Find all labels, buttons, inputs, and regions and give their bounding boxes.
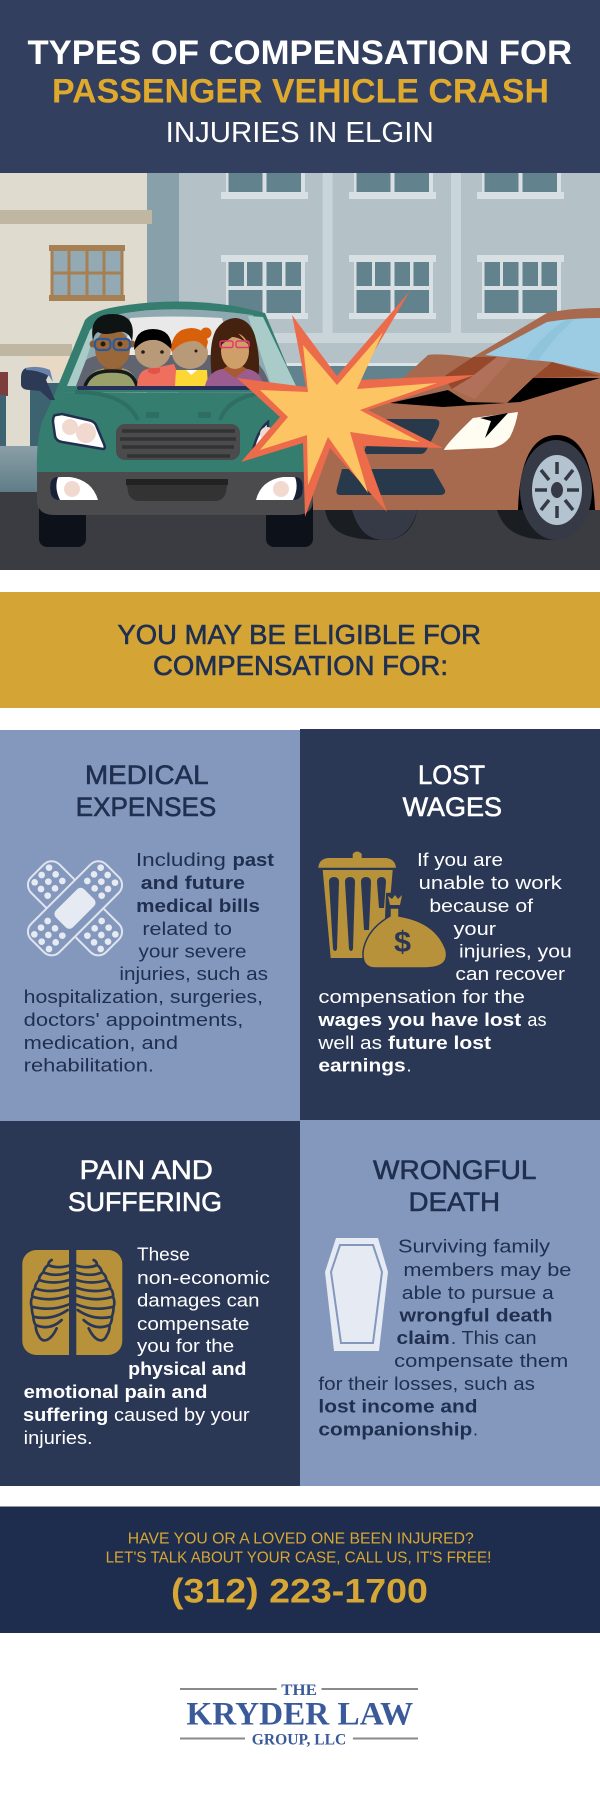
- body text: pain and suffering: damages can: [137, 1290, 260, 1310]
- lower air intake: [126, 479, 228, 501]
- heading: wrongful death: DEATH: [409, 1187, 500, 1217]
- body text: pain and suffering: compensate: [137, 1314, 250, 1334]
- body text: medical expenses: hospitalization, surgeries,: [24, 987, 263, 1007]
- body text: pain and suffering: emotional pain and: [24, 1382, 207, 1402]
- heading: medical expenses: [76, 760, 216, 822]
- driver: [85, 314, 138, 386]
- body text: medical expenses: your severe: [138, 942, 246, 962]
- heading: lost wages: [403, 760, 502, 822]
- rear seats: [76, 355, 270, 386]
- call to action banner: LET'S TALK ABOUT YOUR CASE, CALL US, IT'S FREE!: [106, 1550, 491, 1566]
- icon: coffin: [325, 1238, 388, 1351]
- logo: the kryder law group: KRYDER LAW: [186, 1696, 413, 1732]
- body text: lost wages: If you are: [417, 850, 503, 870]
- icon: trash can with money bag: [318, 852, 447, 968]
- heading: pain and suffering: [68, 1155, 222, 1217]
- body text: wrongful death: companionship: [318, 1420, 472, 1440]
- body text: wrongful death: members may be: [403, 1260, 571, 1280]
- body text: wrongful death: claim: [396, 1328, 450, 1348]
- body text: medical expenses: related to: [142, 919, 232, 939]
- body text: pain and suffering: non-economic: [137, 1268, 270, 1288]
- heading: lost wages: LOST: [418, 760, 485, 790]
- heading: pain and suffering: PAIN AND: [80, 1155, 213, 1185]
- body text: lost wages: compensation for the: [318, 987, 525, 1007]
- body text: pain and suffering: physical and: [128, 1359, 246, 1379]
- heading: medical expenses: EXPENSES: [76, 792, 216, 822]
- header banner: [0, 0, 600, 173]
- body text: wrongful death: . This can: [451, 1328, 536, 1348]
- body text: pain and suffering: [23, 1244, 270, 1448]
- body text: medical expenses: past: [232, 850, 274, 870]
- call to action banner: (312) 223-1700: [171, 1572, 428, 1610]
- body text: pain and suffering: These: [137, 1244, 190, 1264]
- side mirror: [21, 367, 55, 400]
- section banner: you may be eligible: YOU MAY BE ELIGIBLE FOR: [118, 619, 481, 650]
- body text: lost wages: future lost: [388, 1033, 491, 1053]
- cabin: [55, 301, 298, 393]
- body text: medical expenses: injuries, such as: [119, 964, 268, 984]
- fog lights: [50, 477, 303, 500]
- icon: crossed bandages: [23, 857, 127, 960]
- body text: lost wages: wages you have lost: [317, 1010, 521, 1030]
- body text: pain and suffering: caused by your: [114, 1405, 250, 1425]
- logo: the kryder law group: THE: [281, 1682, 317, 1699]
- body text: lost wages: unable to work: [419, 873, 563, 893]
- body text: wrongful death: Surviving family: [398, 1236, 550, 1256]
- body text: lost wages: as: [527, 1010, 546, 1030]
- section banner: you may be eligible: [0, 592, 600, 708]
- body text: pain and suffering: suffering: [23, 1405, 108, 1425]
- body text: medical expenses: rehabilitation.: [24, 1056, 154, 1076]
- header banner: INJURIES IN ELGIN: [166, 117, 434, 149]
- body text: lost wages: injuries, you: [459, 942, 572, 962]
- body text: pain and suffering: injuries.: [24, 1428, 93, 1448]
- headlights: [53, 414, 274, 450]
- child two: [171, 328, 212, 386]
- child one: [134, 329, 177, 386]
- crash starburst: [237, 291, 475, 517]
- logo: the kryder law group: [180, 1682, 418, 1748]
- illustration: car crash street scene: [0, 173, 600, 570]
- body text: lost wages: because of: [429, 896, 534, 916]
- body text: lost wages: .: [406, 1056, 412, 1076]
- front body: [37, 393, 313, 475]
- body text: wrongful death: [318, 1236, 571, 1440]
- heading: medical expenses: MEDICAL: [85, 760, 209, 790]
- body text: lost wages: your: [454, 919, 496, 939]
- bumper: [37, 472, 313, 515]
- section banner: you may be eligible: COMPENSATION FOR:: [153, 650, 448, 681]
- body text: medical expenses: Including: [136, 850, 226, 870]
- body text: wrongful death: wrongful death: [398, 1306, 553, 1326]
- body text: wrongful death: compensate them: [394, 1351, 568, 1371]
- body text: wrongful death: able to pursue a: [402, 1283, 555, 1303]
- heading: lost wages: WAGES: [403, 792, 502, 822]
- body text: lost wages: [317, 850, 572, 1076]
- body text: medical expenses: and future: [141, 873, 245, 893]
- body text: medical expenses: medication, and: [24, 1033, 178, 1053]
- body text: pain and suffering: you for the: [137, 1336, 234, 1356]
- tires: [39, 501, 313, 547]
- icon: rib cage: [22, 1248, 122, 1358]
- logo: the kryder law group: GROUP, LLC: [252, 1731, 346, 1748]
- green car: [21, 301, 313, 547]
- panel: lost wages: [300, 729, 600, 1120]
- panel: pain and suffering: [0, 1121, 300, 1486]
- header banner: TYPES OF COMPENSATION FOR: [28, 34, 572, 72]
- body text: lost wages: can recover: [455, 964, 565, 984]
- icon: trash can with money bag: $: [394, 926, 411, 959]
- body text: wrongful death: for their losses, such as: [318, 1374, 535, 1394]
- body text: medical expenses: [24, 850, 274, 1076]
- header banner: PASSENGER VEHICLE CRASH: [52, 72, 549, 110]
- heading: wrongful death: [373, 1155, 536, 1217]
- panel: medical expenses: [0, 730, 300, 1121]
- body text: lost wages: earnings: [318, 1056, 406, 1076]
- body text: lost wages: well as: [317, 1033, 382, 1053]
- building windows: [221, 173, 564, 319]
- heading: pain and suffering: SUFFERING: [68, 1187, 222, 1217]
- background buildings: [0, 173, 600, 493]
- road: [0, 492, 600, 570]
- body text: medical expenses: medical bills: [136, 896, 260, 916]
- heading: wrongful death: WRONGFUL: [373, 1155, 536, 1185]
- call to action banner: [0, 1506, 600, 1633]
- brown car: [310, 308, 600, 540]
- grille: [116, 424, 240, 460]
- mother: [205, 318, 263, 386]
- panel: wrongful death: [300, 1120, 600, 1486]
- call to action banner: HAVE YOU OR A LOVED ONE BEEN INJURED?: [128, 1530, 474, 1548]
- body text: wrongful death: .: [473, 1420, 478, 1440]
- body text: medical expenses: doctors' appointments,: [24, 1010, 243, 1030]
- body text: wrongful death: lost income and: [318, 1396, 478, 1416]
